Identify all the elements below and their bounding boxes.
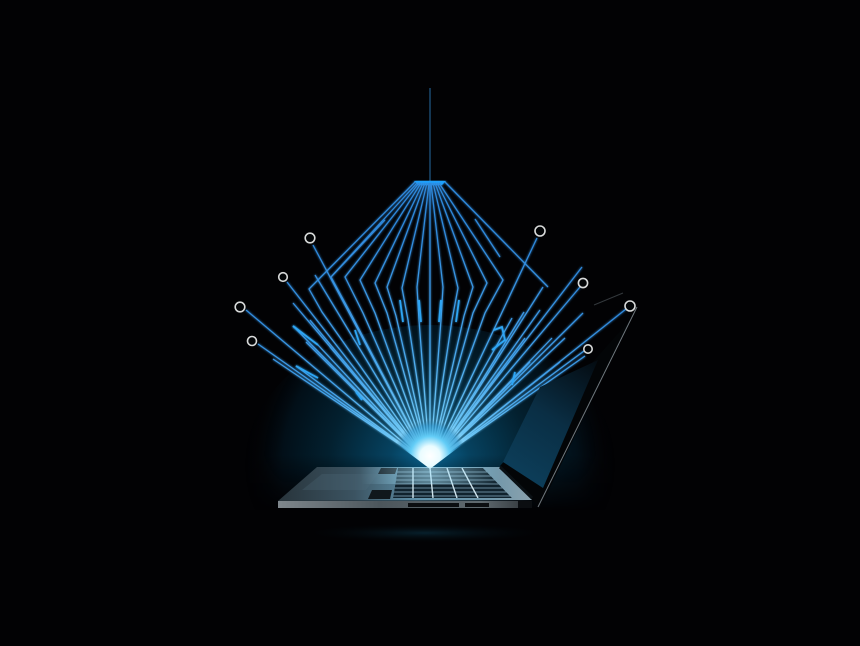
front edge xyxy=(278,501,532,508)
circuit accents xyxy=(293,300,515,400)
lid edge highlight xyxy=(538,307,637,507)
deck light spill xyxy=(345,467,515,484)
diamond circuit lines xyxy=(309,182,548,465)
background glow xyxy=(270,325,590,501)
node 5 xyxy=(535,226,545,236)
keyboard xyxy=(390,468,520,498)
apex bar xyxy=(414,181,446,185)
light source xyxy=(397,421,462,468)
laptop screen lid xyxy=(500,307,637,508)
floor reflection xyxy=(300,523,550,543)
front ports xyxy=(408,501,532,508)
node 6 xyxy=(578,278,588,288)
node circles xyxy=(235,226,635,353)
laptop xyxy=(278,293,637,508)
laptop screen panel xyxy=(503,360,598,488)
node 1 xyxy=(305,233,315,243)
trackpad xyxy=(302,474,378,490)
keyboard deck xyxy=(278,467,532,501)
lid stray highlight xyxy=(594,293,623,305)
vertical beam xyxy=(429,88,431,182)
light core xyxy=(397,421,462,468)
hinge xyxy=(500,467,532,498)
node 7 xyxy=(625,301,635,311)
node 3 xyxy=(235,302,245,312)
node 2 xyxy=(279,273,287,281)
side controls xyxy=(368,468,397,499)
node 8 xyxy=(584,345,592,353)
infographic illustration xyxy=(234,88,638,538)
node 4 xyxy=(248,336,256,346)
fan rays xyxy=(246,238,626,465)
